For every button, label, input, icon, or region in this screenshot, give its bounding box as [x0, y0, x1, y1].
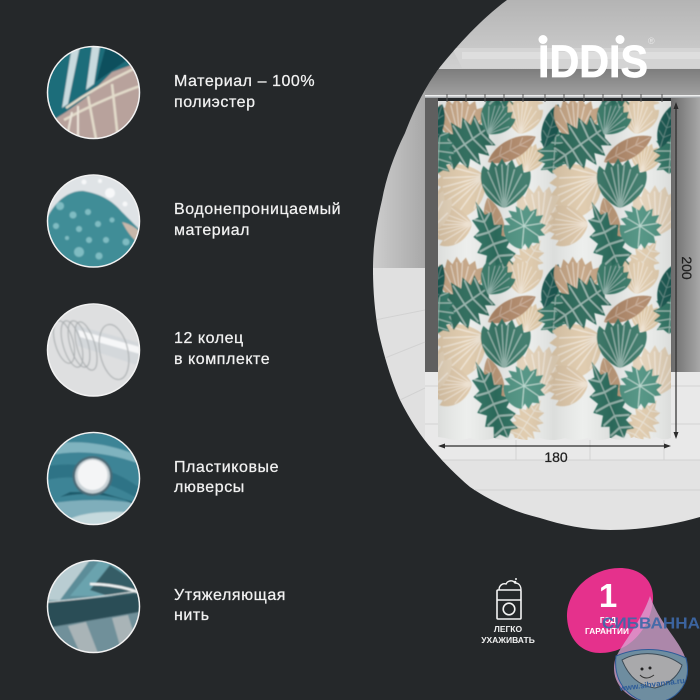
feature 3: rings — [47, 304, 140, 397]
watermark: Sibvanna: СИБВАННА — [602, 616, 700, 632]
watermark: Sibvanna: www.sibvanna.ru — [618, 676, 685, 693]
icon: water drops — [47, 175, 140, 268]
logo: IDDIS: IDDIS — [538, 36, 648, 87]
feature 3 text: в комплекте — [174, 351, 270, 368]
feature 3 text — [174, 330, 270, 368]
feature 1 text — [174, 73, 315, 111]
dimension: width 180: 180 — [544, 449, 568, 465]
bathroom photo — [370, 0, 700, 540]
feature 2 text: материал — [174, 222, 250, 239]
icon: washing machine — [497, 578, 521, 619]
icon: hem thread — [47, 560, 140, 653]
dimension: height 200 — [674, 102, 695, 439]
feature 1 text: Материал – 100% — [174, 73, 315, 90]
icon: plastic grommet — [47, 433, 140, 526]
warranty badge: ГОД — [600, 616, 616, 625]
feature 4: grommets — [47, 432, 140, 526]
curtain — [438, 94, 671, 440]
easy care label — [481, 624, 535, 645]
easy care label: ЛЕГКО — [494, 624, 523, 634]
feature 1 text: полиэстер — [174, 94, 256, 111]
feature 2 text — [174, 201, 341, 239]
feature 2: waterproof — [47, 175, 140, 268]
icon: fabric close-up — [47, 46, 140, 139]
feature 3 text: 12 колец — [174, 330, 244, 347]
warranty badge: ГАРАНТИИ — [585, 626, 629, 636]
curtain rod — [425, 95, 700, 98]
feature 4 text: Пластиковые — [174, 459, 279, 476]
feature 5 text: нить — [174, 607, 210, 624]
feature 5: weighted thread — [47, 560, 140, 653]
warranty badge: 1 — [599, 577, 617, 614]
dimension: height 200: 200 — [679, 256, 695, 280]
logo: IDDIS: ® — [648, 36, 655, 46]
easy care label: УХАЖИВАТЬ — [481, 635, 535, 645]
watermark: Sibvanna — [602, 596, 700, 700]
icon: rod with rings — [47, 304, 140, 397]
feature 5 text — [174, 587, 286, 624]
feature 4 text: люверсы — [174, 479, 245, 496]
dimension: width 180 — [438, 444, 671, 465]
feature 4 text — [174, 459, 279, 496]
feature 5 text: Утяжеляющая — [174, 587, 286, 604]
feature 2 text: Водонепроницаемый — [174, 201, 341, 218]
warranty badge — [567, 568, 653, 653]
feature 1: material — [47, 46, 140, 139]
